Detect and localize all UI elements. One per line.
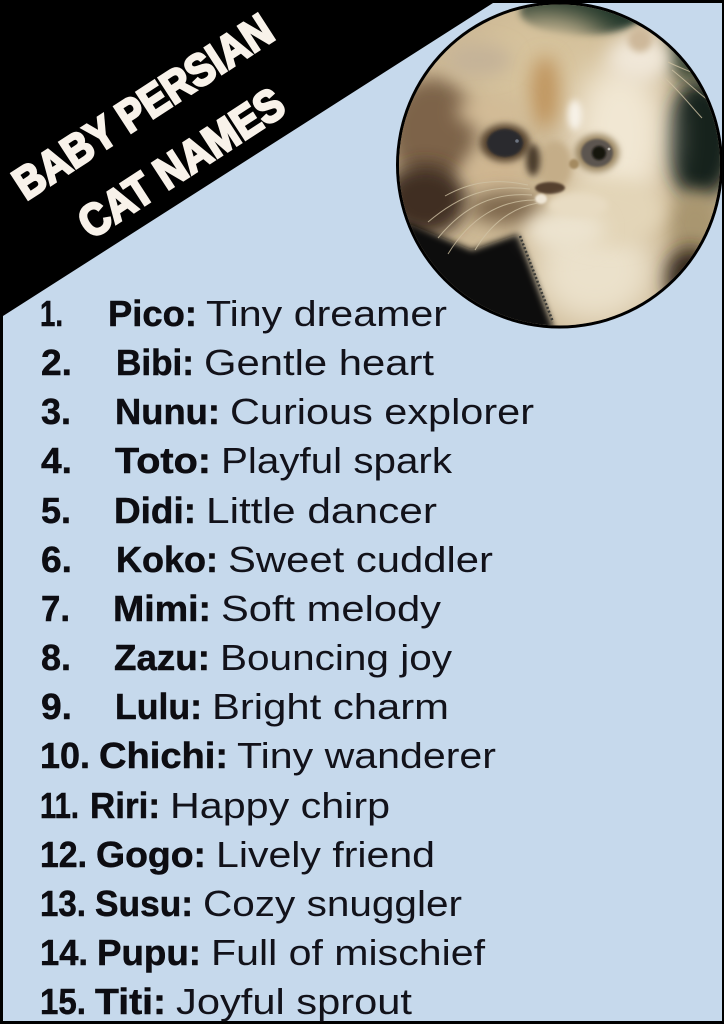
list item 8: 8. [41, 637, 71, 678]
list item 12 [40, 834, 435, 875]
list item 15: 15. [40, 981, 86, 1022]
list item 10 [40, 735, 496, 776]
name list [40, 293, 534, 1022]
black diagonal title banner [0, 0, 493, 320]
list item 15: Joyful sprout [176, 981, 412, 1022]
list item 14: Full of mischief [211, 932, 486, 973]
list item 13 [40, 883, 462, 924]
list item 4: Playful spark [221, 440, 453, 481]
list item 14: Pupu: [97, 932, 201, 973]
list item 6: 6. [41, 539, 72, 580]
list item 6: Sweet cuddler [228, 539, 493, 580]
list item 2 [41, 342, 434, 383]
icon: jacket zip [520, 236, 553, 322]
list item 13: 13. [40, 883, 86, 924]
dark jacket [405, 222, 554, 335]
list item 5: Didi: [114, 490, 196, 531]
list item 7: 7. [41, 588, 70, 629]
list item 15 [40, 981, 412, 1022]
icon: muzzle and nose [526, 141, 608, 217]
list item 7: Mimi: [113, 588, 211, 629]
list item 5: Little dancer [206, 490, 437, 531]
list item 2: Gentle heart [204, 342, 434, 383]
list item 6 [41, 539, 493, 580]
kitten photo in circle [383, 0, 724, 335]
list item 4: Toto: [115, 440, 211, 481]
list item 1: Tiny dreamer [206, 293, 447, 334]
title: CAT NAMES [69, 78, 294, 248]
list item 8 [41, 637, 453, 678]
icon: left eye [480, 124, 530, 162]
list item 8: Bouncing joy [220, 637, 453, 678]
list item 9: Lulu: [115, 686, 202, 727]
list item 2: Bibi: [116, 342, 194, 383]
list item 12: Lively friend [216, 834, 435, 875]
list item 14 [40, 932, 486, 973]
list item 9: Bright charm [212, 686, 449, 727]
list item 15: Titi: [95, 981, 166, 1022]
list item 1: 1. [40, 293, 63, 334]
list item 14: 14. [40, 932, 88, 973]
list item 3: Curious explorer [230, 391, 534, 432]
list item 3 [41, 391, 534, 432]
list item 5: 5. [41, 490, 71, 531]
list item 9: 9. [41, 686, 72, 727]
list item 8: Zazu: [114, 637, 210, 678]
list item 4: 4. [41, 440, 72, 481]
list item 5 [41, 490, 437, 531]
list item 11: 11. [40, 785, 79, 826]
list item 10: 10. [40, 735, 90, 776]
list item 10: Tiny wanderer [237, 735, 496, 776]
list item 12: 12. [40, 834, 87, 875]
list item 11 [40, 785, 390, 826]
list item 12: Gogo: [96, 834, 206, 875]
list item 3: 3. [41, 391, 71, 432]
list item 2: 2. [41, 342, 72, 383]
list item 11: Happy chirp [170, 785, 390, 826]
list item 10: Chichi: [99, 735, 228, 776]
list item 1: Pico: [108, 293, 197, 334]
list item 4 [41, 440, 453, 481]
list item 11: Riri: [90, 785, 160, 826]
list item 6: Koko: [116, 539, 218, 580]
list item 9 [41, 686, 449, 727]
icon: whiskers [428, 62, 708, 254]
list item 13: Cozy snuggler [203, 883, 462, 924]
list item 3: Nunu: [115, 391, 220, 432]
list item 1 [40, 293, 447, 334]
list item 13: Susu: [95, 883, 193, 924]
list item 7 [41, 588, 442, 629]
list item 7: Soft melody [221, 588, 442, 629]
icon: right eye [575, 134, 619, 172]
